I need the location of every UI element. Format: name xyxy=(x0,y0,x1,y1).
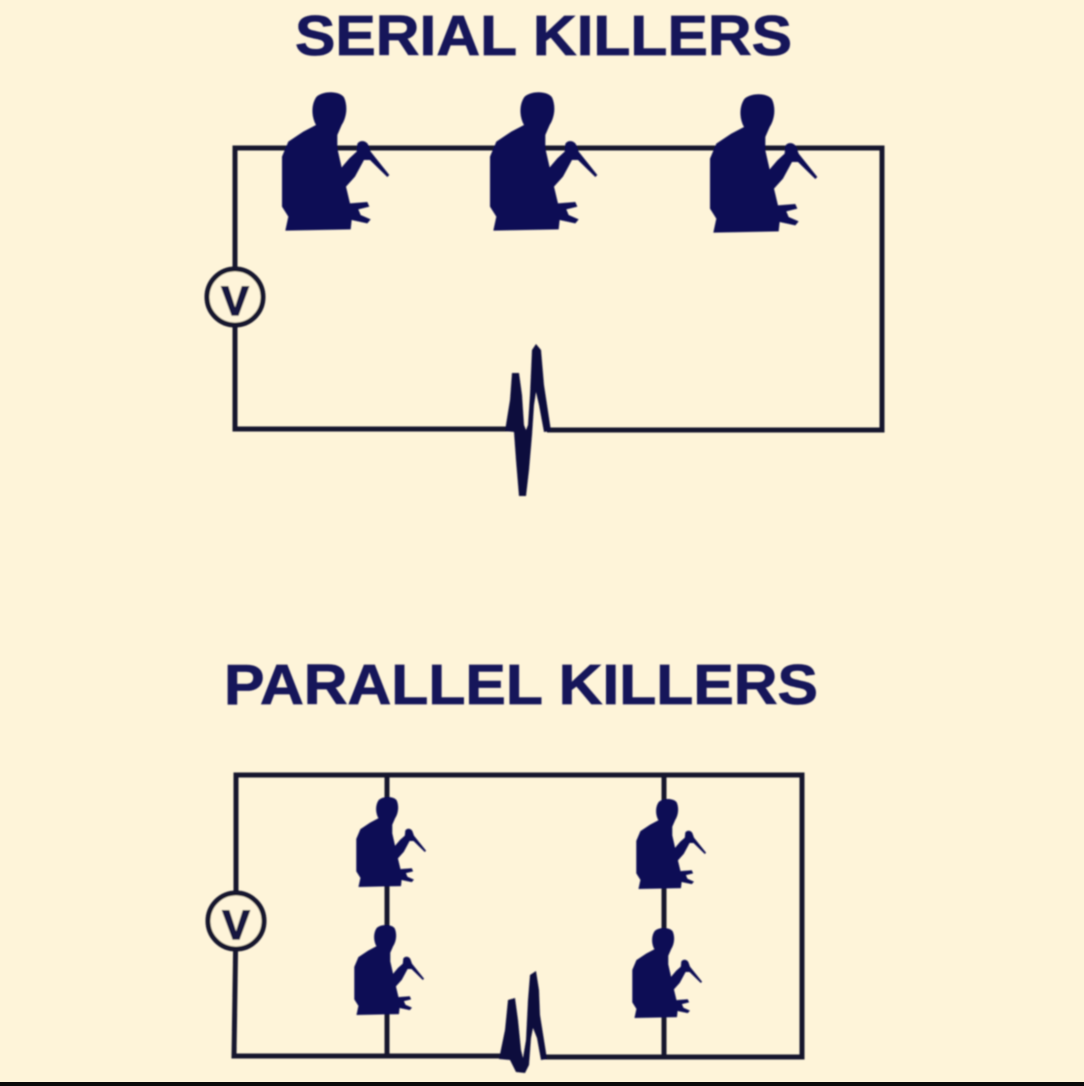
parallel killer figure: lower left xyxy=(354,925,424,1015)
parallel killer figure: upper right xyxy=(636,799,706,889)
circuit: serial killers xyxy=(207,92,882,496)
serial voltmeter: V xyxy=(221,278,249,324)
parallel circuit wires xyxy=(234,775,802,1057)
parallel voltmeter: V xyxy=(222,902,250,948)
serial resistor spike xyxy=(505,344,551,496)
serial voltmeter xyxy=(207,269,263,325)
serial killer figure 2 xyxy=(490,92,597,231)
parallel voltmeter xyxy=(208,893,264,949)
serial killer figure 1 xyxy=(282,92,389,231)
parallel killer figure: lower right xyxy=(632,928,702,1018)
circuit: parallel killers xyxy=(208,775,802,1073)
serial circuit wires xyxy=(235,148,882,430)
title: parallel killers: PARALLEL KILLERS xyxy=(224,653,818,717)
serial killer figure 3 xyxy=(710,94,817,233)
parallel resistor spike xyxy=(499,971,547,1073)
title: serial killers: SERIAL KILLERS xyxy=(295,4,792,68)
bottom black edge xyxy=(0,1082,1084,1086)
parallel killer figure: upper left xyxy=(356,797,426,887)
